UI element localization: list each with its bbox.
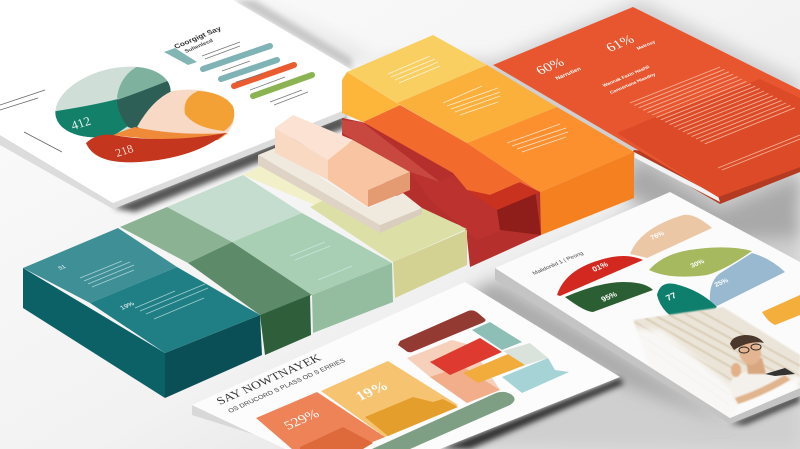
head bbox=[738, 342, 762, 365]
legend icon bbox=[164, 48, 197, 65]
yellow top bbox=[347, 35, 487, 103]
red mid bbox=[410, 172, 503, 240]
photo backdrop bbox=[633, 306, 800, 402]
blinds bbox=[634, 310, 800, 386]
shape: dark green bbox=[565, 282, 653, 312]
yellow-green front bbox=[393, 230, 467, 298]
card: top-left pie chart sheet bbox=[0, 0, 352, 209]
darker lower band bbox=[617, 79, 800, 197]
light green top back bbox=[167, 175, 302, 242]
tile: yellow bbox=[321, 361, 458, 437]
red band top bbox=[342, 120, 440, 182]
legend pills bbox=[203, 46, 312, 96]
pie: orange circle bbox=[185, 91, 234, 131]
left fade to white bbox=[636, 326, 736, 418]
top teal stat: 51 bbox=[58, 264, 67, 271]
shape labels bbox=[590, 230, 730, 304]
sheet subheading: OS DRUCORD S PLASS OD S ERRIES bbox=[227, 358, 347, 414]
tile: light cyan bbox=[502, 358, 569, 393]
vest bbox=[765, 368, 795, 376]
shirt bbox=[730, 372, 788, 396]
photo: man with glasses bbox=[625, 307, 800, 425]
stat: 52%: 529% bbox=[281, 407, 323, 433]
teal right face bbox=[165, 315, 262, 398]
tile: light teal bbox=[472, 322, 522, 350]
tile: orange bbox=[463, 352, 525, 383]
slab top bbox=[258, 148, 422, 225]
sheet title: Malidonlid 1 | Peong bbox=[532, 251, 585, 276]
dark green front bbox=[260, 295, 311, 355]
card: right sheet with shapes and photo bbox=[495, 192, 800, 425]
pie: green segments bbox=[55, 67, 171, 138]
peach left face bbox=[275, 128, 328, 180]
shape: orange tab bbox=[762, 295, 800, 325]
shape: olive bbox=[649, 247, 752, 277]
stat labels: Wannak Faxin Hashil bbox=[602, 65, 651, 88]
hand bbox=[731, 363, 741, 377]
orange top bbox=[467, 107, 634, 192]
shape: red bbox=[557, 256, 643, 296]
shape: teal bbox=[657, 283, 717, 322]
arm bbox=[735, 375, 790, 404]
teal top front bbox=[90, 267, 260, 353]
left caption bbox=[0, 90, 62, 152]
shape labels: 95% bbox=[599, 290, 619, 304]
red right dark bbox=[497, 190, 541, 235]
peach end bbox=[368, 172, 410, 207]
lower peach bbox=[430, 366, 500, 403]
orange front bbox=[540, 152, 634, 235]
light green front bbox=[312, 263, 393, 333]
light green top front bbox=[232, 213, 392, 295]
peach block with slab bbox=[258, 115, 422, 233]
strip: green bbox=[372, 392, 515, 449]
stacked block: green group bbox=[23, 165, 467, 398]
block notes bbox=[388, 56, 568, 152]
glasses bbox=[739, 344, 761, 353]
tile: coral bbox=[256, 392, 385, 449]
stat: 61%: 61% bbox=[603, 32, 638, 55]
sheet edge bbox=[495, 268, 800, 424]
cover face bbox=[493, 7, 800, 197]
stacked block: yellow-orange-red group bbox=[342, 35, 634, 267]
pie: red segment bbox=[86, 133, 226, 162]
neck bbox=[746, 358, 766, 374]
shape labels: 76% bbox=[649, 230, 666, 242]
shape labels: 77 bbox=[664, 290, 678, 303]
peach right face bbox=[328, 140, 410, 207]
sheet edge bbox=[0, 110, 345, 209]
teal notes bbox=[80, 242, 352, 319]
red block base bbox=[342, 118, 541, 267]
stat labels: Metrosy bbox=[636, 39, 657, 51]
card: top-right red report bbox=[493, 7, 800, 204]
peach top bbox=[275, 115, 353, 160]
tile: pale grey bbox=[503, 343, 548, 365]
sheet face bbox=[495, 192, 800, 418]
shape labels: 01% bbox=[590, 260, 610, 274]
shape: peach bbox=[630, 215, 712, 258]
teal stat: 19% bbox=[119, 301, 136, 311]
teal top back bbox=[23, 228, 177, 303]
hair bbox=[730, 335, 764, 350]
dark green top front bbox=[188, 242, 312, 315]
orange band lower bbox=[467, 182, 540, 210]
page edge and cover bbox=[632, 150, 800, 204]
shape labels: 30% bbox=[689, 258, 706, 270]
pie: orange band bbox=[113, 127, 228, 140]
tile inner: amber bbox=[365, 397, 458, 436]
stat: 60%: 60% bbox=[533, 55, 568, 78]
teal left face bbox=[23, 268, 165, 398]
bottom-right white strip bbox=[734, 373, 800, 416]
sheet face bbox=[0, 0, 352, 203]
amber top bbox=[397, 65, 557, 143]
peach backing bbox=[407, 340, 500, 403]
legend notes bbox=[202, 42, 308, 105]
stat labels: Narrutien bbox=[555, 66, 583, 81]
sheet heading: SAY NOWTNAYEK bbox=[214, 351, 324, 407]
pie: light segment bbox=[47, 55, 179, 149]
yellow left face bbox=[342, 72, 400, 122]
yellow-green top pale bbox=[243, 165, 330, 205]
slab end bbox=[380, 208, 422, 233]
stat: 19%: 19% bbox=[352, 378, 392, 404]
report body text bbox=[630, 67, 800, 170]
legend subheading: Sulienlecd bbox=[184, 38, 215, 55]
card: bottom sheet with tiles bbox=[192, 282, 620, 449]
slab side bbox=[258, 155, 380, 233]
legend heading: Coorgigt Say bbox=[172, 24, 224, 51]
pie label: 412: 412 bbox=[69, 114, 93, 133]
tile inner: coral dark bbox=[300, 427, 373, 449]
pie: peach segment bbox=[137, 90, 234, 135]
shape labels: 25% bbox=[713, 277, 730, 289]
sheet edge bbox=[192, 405, 300, 449]
orange band bbox=[363, 105, 540, 195]
shape: blue bbox=[710, 253, 785, 306]
dark green top back bbox=[120, 207, 232, 263]
sheet face bbox=[192, 282, 620, 449]
tile: red bbox=[430, 338, 502, 375]
stat labels bbox=[555, 39, 657, 95]
pie label: 218: 218 bbox=[113, 142, 135, 160]
stat labels: Connertuna Hiasdny bbox=[609, 72, 657, 95]
pill: dark red bbox=[398, 310, 486, 352]
yellow-green top bbox=[310, 198, 467, 262]
